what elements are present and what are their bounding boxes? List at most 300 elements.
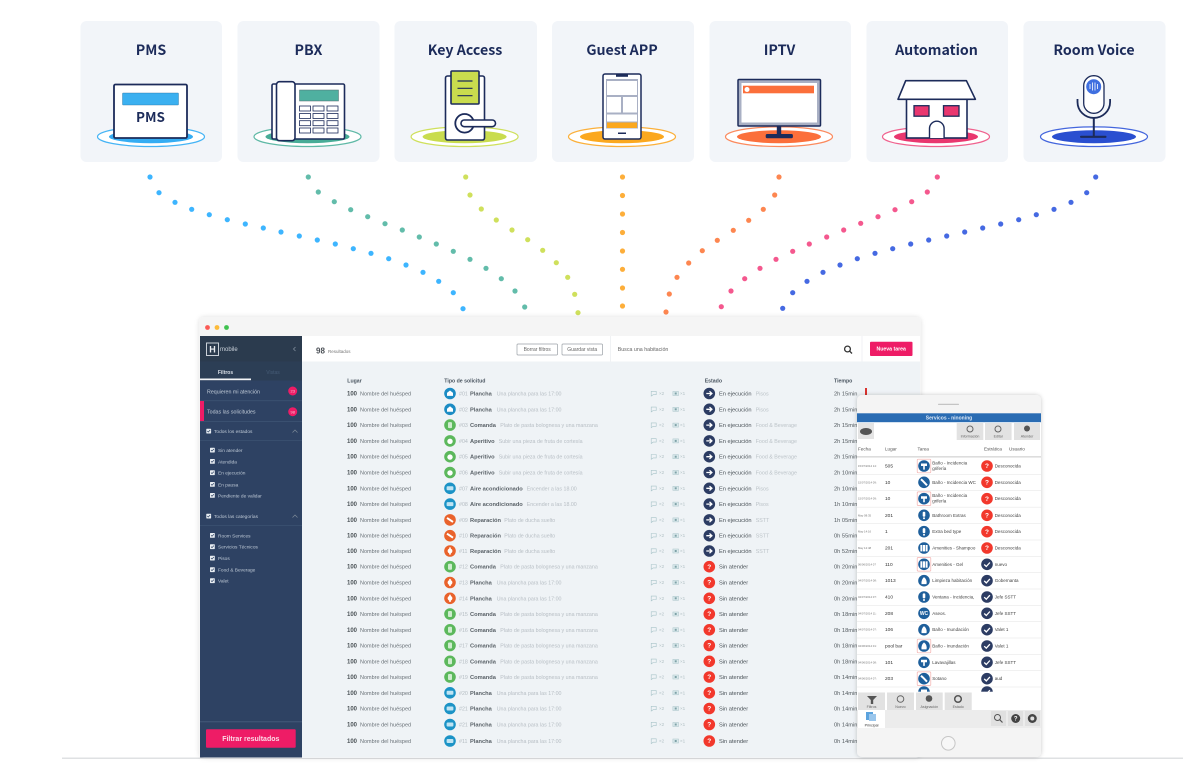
row 11: #11 [459,549,467,555]
row 09: ×2 [659,517,665,522]
row 05: Subir una pieza de fruta de cortesía [499,455,583,461]
row 09: ×1 [680,517,686,522]
row 10: ×1 [680,533,686,538]
panel: mobile application [857,395,1041,757]
row 10: SSTT [756,534,770,540]
dotted connector: Key Access [463,174,581,315]
row 06: Aperitivo [470,470,495,476]
row 22: #21 [459,722,468,728]
mobile row 13 [858,656,1016,668]
row 09: SSTT [756,518,770,524]
mobile row 6: ? [985,545,989,552]
row 17: #17 [459,644,468,650]
row 03: ×1 [680,423,686,428]
row 22: Sin atender [719,722,748,728]
row 23: 100 [347,739,358,745]
row 12: ×2 [659,564,665,569]
row 05: Nombre del huésped [360,455,411,461]
row 12: Plato de pasta bolognesa y una manzana [500,565,598,571]
mobile row 6: 201 [885,546,893,552]
row 06: En ejecución [719,470,752,476]
row 16: 0h 18min [834,628,857,634]
row 01: En ejecución [719,392,752,398]
mobile row 1: 505 [885,464,893,470]
row 01: Nombre del huésped [360,392,411,398]
filter group: categorías: Todos las categorías [214,514,259,520]
filter group: estados [200,429,302,499]
mobile row 10: 04/07/2014 11: [858,611,877,615]
row 06: Food & Beverage [756,470,797,476]
row 23: Una plancha para las 17:00 [497,739,562,745]
row 06: 2h 10min [834,470,857,476]
mobile row 11: 04/07/2014 07: [858,628,877,632]
mobile row 9: 410 [885,594,893,600]
mobile row 1: 15/07/2014 14: [858,464,877,468]
results count: Resultados [328,349,351,354]
mobile toolbar: Información [961,435,979,439]
filter group: categorías: Food & Beverage [218,568,256,574]
row 12 [347,561,857,572]
row 04: ×1 [680,438,686,443]
row 06: #06 [459,470,468,476]
row 02: 100 [347,407,358,413]
heading: Automation: Automation [894,40,978,60]
mobile row 10: 208 [885,611,893,617]
row 09: Nombre del huésped [360,518,411,524]
button: Borrar filtros [517,344,558,355]
mobile row 10 [858,608,1016,619]
mobile row 10: Aseos. [932,611,946,616]
button: Borrar filtros: Borrar filtros [524,347,551,353]
row 17: ×2 [659,643,665,648]
icon: desk telephone [254,82,361,146]
row 01: 2h 15min [834,392,857,398]
row 22: ×1 [680,722,686,727]
mobile row 9: 04/07/2014 07: [858,595,877,599]
row 23: Sin atender [719,739,748,745]
mobile toolbar: Atender [1021,435,1034,439]
mobile row 7: 110 [885,562,893,568]
row 15: Comanda [470,612,497,618]
mobile row 13: 101 [885,660,893,666]
row 05: #05 [459,455,468,461]
row 05: Food & Beverage [756,455,797,461]
button: Guardar vista [562,344,602,355]
row 15: #15 [459,612,468,618]
row 03: #03 [459,423,468,429]
row 01: ×1 [680,391,686,396]
row 04: 100 [347,439,358,445]
row 12: Comanda [470,565,497,571]
row 11: Nombre del huésped [360,549,411,555]
row 08: ×1 [680,502,686,507]
row 18: ×1 [680,659,686,664]
mobile row 11: 106 [885,627,893,633]
row 19: 100 [347,675,358,681]
row 18: 100 [347,659,358,665]
mobile row 3 [858,492,1021,506]
mobile row 4: May 08:35 [858,513,872,517]
row 15: ? [707,611,711,618]
search field: Busca una habitación [618,347,668,353]
row 07: ×1 [680,486,686,491]
row 20: #20 [459,691,468,697]
row 04: 2h 15min [834,439,857,445]
mobile bottom toolbar: Estado [953,705,964,709]
row 14: 100 [347,596,358,602]
row 06: ×2 [659,470,665,475]
heading: Guest APP: Guest APP [586,40,658,60]
mobile row 14: Sotano [932,676,947,681]
mobile title bar: Servicos - ninoning [926,416,972,422]
row 16: Comanda [470,628,497,634]
mobile row 2: Desconocida [995,480,1021,485]
row 23: Nombre del huésped [360,739,411,745]
row 07: Aire acondicionado [470,486,523,492]
row 09: 100 [347,518,358,524]
row 02: Nombre del huésped [360,407,411,413]
row 12: ×1 [680,564,686,569]
row 21: ×1 [680,706,686,711]
filter group: categorías: Servicios Técnicos [218,545,259,551]
mobile row 11: Baño - Inundación [932,627,969,632]
row 14: Sin atender [719,596,748,602]
mobile row 13: Lavavajillas [932,660,956,665]
request table [347,388,857,747]
row 07: ×2 [659,486,665,491]
row 10: #10 [459,534,468,540]
row 13: ? [707,580,711,587]
row 03: Food & Beverage [756,423,797,429]
row 23: ×1 [680,738,686,744]
heading: Key Access: Key Access [428,40,502,60]
button: Filtrar resultados [206,729,296,748]
mobile bottom toolbar [857,692,1041,710]
row 03: Plato de pasta bolognesa y una manzana [500,423,598,429]
mobile row 12: Valet 1 [995,644,1009,648]
mobile row 8: 04/07/2014 08: [858,579,877,583]
dotted connector: IPTV [663,174,782,315]
mobile row 1 [858,459,1021,473]
mobile row 2: 15/07/2014 09: [858,480,877,484]
filter group: estados: En ejecución [218,471,246,477]
row 05: En ejecución [719,455,752,461]
row 06 [347,467,857,478]
mobile row 4: 201 [885,513,893,519]
row 17: Nombre del huésped [360,644,411,650]
row 03: Comanda [470,423,497,429]
row 08: 1h 10min [834,502,857,508]
row 08: #08 [459,502,468,508]
row 03: 100 [347,423,358,429]
row 23: #11 [459,739,467,745]
panel: IPTV [710,21,851,162]
row 12: Nombre del huésped [360,565,411,571]
row 20: Plancha [470,691,493,697]
mobile row 11 [858,624,1009,636]
mobile toolbar: Editar [994,435,1004,439]
row 08: Aire acondicionado [470,502,523,508]
mobile row 7: nuevo [995,562,1007,567]
row 20: ? [707,690,711,697]
icon: smart house [882,81,990,146]
mobile table headers: Usuario [1009,446,1025,452]
row 17: 100 [347,644,358,650]
mobile row 4: Bathroom Extras [932,513,967,518]
row 21: ? [707,706,711,713]
mobile row 12 [858,639,1009,653]
mobile toolbar [858,423,1040,440]
row 09: Plato de ducha suelto [504,518,555,524]
row 07: #07 [459,486,468,492]
row 15: 100 [347,612,358,618]
row 21: Sin atender [719,706,748,712]
mobile row 14: 04/06/2014 07: [858,677,877,681]
row 15: Plato de pasta bolognesa y una manzana [500,612,598,618]
row 13: Sin atender [719,580,748,586]
mobile row 3: 15/07/2014 09: [858,497,877,501]
icon: search [845,346,852,354]
row 05: ×2 [659,454,665,459]
row 16: #16 [459,628,468,634]
row 14 [347,592,857,604]
table column headers: Tipo de solicitud [444,378,485,384]
button: Filtrar resultados: Filtrar resultados [222,736,279,743]
row 04: Nombre del huésped [360,439,411,445]
row 18: Plato de pasta bolognesa y una manzana [500,659,598,665]
row 22: ×2 [659,722,665,727]
mobile home button [942,736,955,750]
row 17 [347,640,857,651]
row 10: ×2 [659,533,665,538]
mobile title bar [857,413,1041,422]
filter: Requieren mi atención [207,386,297,396]
row 14: Plancha [470,596,493,602]
row 22: Plancha [470,722,493,728]
row 11: ×2 [659,548,665,554]
row 22: Nombre del huésped [360,722,411,728]
mobile row 12: pool bar [885,644,903,650]
dotted connector: PMS [147,174,466,311]
mobile row 6 [858,542,1021,554]
row 13: #13 [459,580,468,586]
row 10 [347,530,857,542]
heading: PBX: PBX [295,40,323,60]
mobile row 3: Baño - Incidencia [932,493,968,498]
row 18: 0h 18min [834,659,857,665]
filter: Todas las solicitudes: 98 [290,409,296,414]
mobile row 5 [858,526,1021,538]
row 08: 100 [347,502,358,508]
table column headers [347,378,852,384]
row 16: ×2 [659,627,665,632]
row 09: 1h 05min [834,518,857,524]
row 04: En ejecución [719,439,752,445]
row 14: ×2 [659,596,665,601]
heading: Room Voice: Room Voice [1053,40,1135,60]
logo: mobile [220,347,238,353]
row 02: En ejecución [719,407,752,413]
row 21: Plancha [470,706,493,712]
mobile row 14 [858,672,1003,686]
window controls [205,325,229,330]
row 07: 2h 10min [834,486,857,492]
baseline rule [62,758,1183,759]
row 19: #19 [459,675,468,681]
dotted connector: Room Voice [780,174,1098,311]
row 17: Comanda [470,644,497,650]
row 05 [347,451,857,462]
mobile row 12: 04/06/2014 01: [858,644,877,648]
row 02: Pisos [756,407,769,413]
mobile row 14: 203 [885,676,893,682]
row 07: 100 [347,486,358,492]
row 13: Una plancha para las 17:00 [497,580,562,586]
row 11: En ejecución [719,549,752,555]
icon: PMS terminal: PMS [136,106,165,126]
row 13: ×1 [680,580,686,585]
filter group: categorías: Room Services [218,533,251,539]
row 19: Sin atender [719,675,748,681]
mobile row 13: 04/06/2014 08: [858,660,877,664]
row 09: #09 [459,518,468,524]
row 23: 0h 14min [834,739,857,745]
row 21 [347,703,857,714]
mobile row 3: grifería [932,499,947,504]
row 02: ×1 [680,407,686,412]
mobile table headers: Lugar [885,446,897,452]
row 20: ×2 [659,690,665,695]
mobile table headers: Fecha [858,446,871,452]
row 20: Una plancha para las 17:00 [497,691,562,697]
mobile table headers [857,446,1041,457]
row 21: ×2 [659,706,665,711]
mobile row 8: Gobernanta [995,578,1019,583]
filter group: estados: Atendida [218,459,237,465]
mobile row 4 [858,510,1021,521]
row 08 [347,498,857,510]
row 01: ×2 [659,391,665,396]
mobile row 11: Valet 1 [995,627,1009,632]
filter group: categorías: Valet [218,579,229,585]
row 09: Reparación [470,518,502,524]
row 16: ×1 [680,627,686,632]
mobile row 10: WC [920,611,929,617]
row 07: Nombre del huésped [360,486,411,492]
mobile navigation bar: ? [1014,717,1018,723]
row 12: #12 [459,565,468,571]
row 17: ×1 [680,643,686,648]
filter group: categorías [200,514,302,585]
row 01: #01 [459,392,468,398]
row 10: 0h 55min [834,534,857,540]
dotted connector: Guest APP [620,174,625,309]
row 07: Pisos [756,486,769,492]
row 20: Sin atender [719,691,748,697]
mobile row 4: Desconocida [995,513,1021,518]
mobile row 7: Amenities - Gel [932,562,963,567]
mobile row 1: Desconocida [995,464,1021,468]
row 08: En ejecución [719,502,752,508]
button: Nueva tarea: Nueva tarea [876,347,906,353]
row 14: ×1 [680,596,686,601]
row 08: Nombre del huésped [360,502,411,508]
heading: IPTV: IPTV [764,40,795,60]
row 11 [347,545,857,557]
panel: Key Access [394,21,537,162]
row 11: Plato de ducha suelto [504,549,555,555]
mobile row 3: 10 [885,496,891,502]
mobile row 6: May 12:48 [858,546,872,550]
row 14: Nombre del huésped [360,596,411,602]
row 05: ×1 [680,454,686,459]
row 02: Una plancha para las 17:00 [497,407,562,413]
row 13 [347,577,857,588]
mobile row 6: Desconocida [995,546,1021,550]
mobile row 2: Baño - Incidencia WC [932,480,977,485]
mobile row 8: 1013 [885,578,896,584]
filter group: estados: En pausa [218,482,239,488]
row 15: Nombre del huésped [360,612,411,618]
mobile row 9 [858,591,1016,603]
row 19: ? [707,674,711,681]
row 06: Subir una pieza de fruta de cortesía [499,470,583,476]
filter: Requieren mi atención: 23 [290,389,296,394]
panel: Guest APP [552,21,694,162]
top bar [302,336,920,362]
icon: television [726,80,832,146]
dotted connector: PBX [306,174,527,310]
row 18: ? [707,658,711,665]
row 15: Sin atender [719,612,748,618]
row 16: 100 [347,628,358,634]
row 16: ? [707,627,711,634]
row 03: ×2 [659,423,665,428]
panel: Room Voice [1024,21,1166,162]
mobile row 10: Jefe SSTT [995,611,1016,616]
button: Nueva tarea [870,342,912,356]
row 01 [347,388,857,399]
row 04: ×2 [659,438,665,443]
mobile row 5: 1 [885,529,888,535]
row 10: 100 [347,534,358,540]
row 08: ×2 [659,502,665,507]
row 23: ? [707,738,711,745]
mobile table headers: Estrática [984,446,1002,452]
mobile row 1: Baño - Incidencia [932,460,968,466]
results count: 98 [316,346,325,356]
mobile row 9: Jefe SSTT [995,594,1016,600]
row 16: Plato de pasta bolognesa y una manzana [500,628,598,634]
row 04 [347,435,857,447]
mobile row 2 [858,476,1021,488]
row 11: 0h 52min [834,549,857,555]
row 08: Encender a las 18.00 [527,502,577,508]
row 06: 100 [347,470,358,476]
row 12: Sin atender [719,565,748,571]
filter: Todas las solicitudes: Todas las solicitudes [207,410,256,416]
row 20: 100 [347,691,358,697]
row 23: Plancha [470,739,493,745]
row 19: 0h 14min [834,675,857,681]
table column headers: Tiempo [834,378,852,384]
row 21: Nombre del huésped [360,706,411,712]
row 03: Nombre del huésped [360,423,411,429]
row 19: Plato de pasta bolognesa y una manzana [500,675,598,681]
button: Guardar vista: Guardar vista [567,347,597,353]
row 14: ? [707,595,711,602]
mobile row 1: ? [985,463,989,470]
